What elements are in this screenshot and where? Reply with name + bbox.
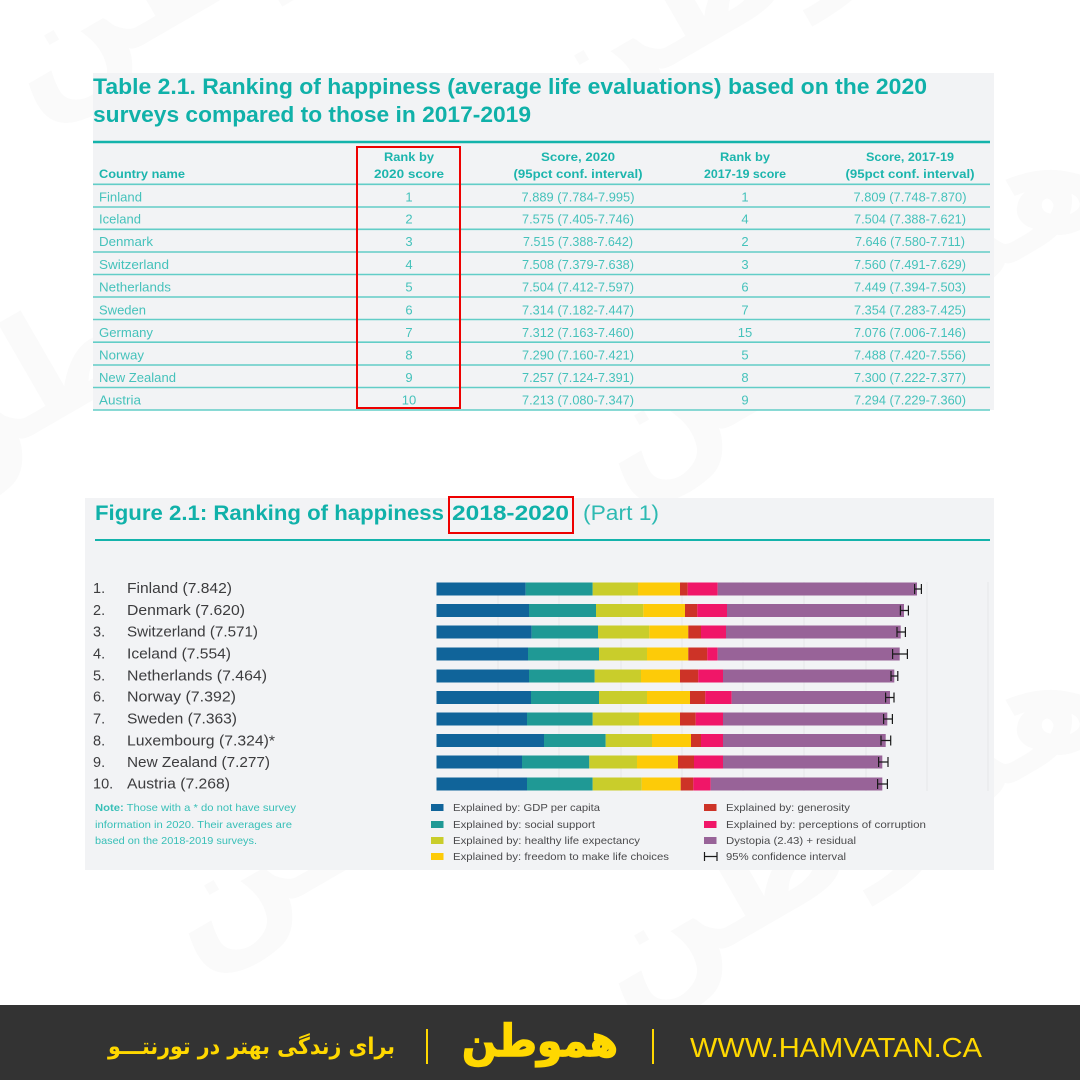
footer tagline: برای زندگی بهتر در تورنتـــو: [107, 1033, 395, 1060]
table rows: 4: [741, 212, 749, 226]
table rows: Denmark: [99, 234, 153, 249]
table header: Score, 2020: [541, 150, 615, 164]
country labels: 6.: [93, 690, 105, 706]
table rows: Switzerland: [99, 257, 169, 272]
table rows: 1: [405, 190, 413, 204]
table rows: 5: [741, 348, 749, 362]
country labels: Iceland (7.554): [127, 646, 231, 662]
panel: figure 2.1: [85, 497, 994, 870]
watermark pattern: هموطن: [121, 553, 706, 992]
legend: [431, 802, 926, 863]
table rules: [93, 142, 990, 410]
note: [95, 802, 297, 847]
table rows: 7.449 (7.394-7.503): [854, 280, 966, 294]
table rows: 9: [405, 370, 413, 385]
country labels: 2.: [93, 603, 105, 619]
table title: [93, 74, 927, 127]
table rows: 7.515 (7.388-7.642): [523, 234, 633, 249]
figure title: [95, 502, 659, 525]
country labels: 5.: [93, 668, 105, 684]
table rows: 7.809 (7.748-7.870): [854, 190, 966, 204]
table rows: 3: [405, 234, 413, 249]
table rows: 7.646 (7.580-7.711): [855, 234, 965, 249]
legend: Explained by: perceptions of corruption: [726, 819, 926, 831]
table rows: 7.314 (7.182-7.447): [522, 302, 634, 318]
table header: 2020 score: [374, 167, 444, 181]
table rows: 7.354 (7.283-7.425): [854, 302, 966, 318]
panel: table 2.1: [93, 73, 994, 410]
table rows: 7.889 (7.784-7.995): [522, 190, 634, 204]
legend: 95% confidence interval: [726, 851, 846, 863]
table header: 2017-19 score: [704, 167, 786, 181]
table rows: Finland: [99, 190, 142, 204]
table rows: 7.300 (7.222-7.377): [854, 370, 966, 385]
note: Note: Those with a * do not have survey: [95, 802, 297, 814]
country labels: 4.: [93, 646, 105, 662]
table rows: Sweden: [99, 302, 146, 318]
bar: Finland: [436, 582, 921, 596]
table header: [99, 150, 975, 181]
table rows: Iceland: [99, 212, 141, 226]
table rows: 5: [405, 280, 413, 294]
table rows: Norway: [99, 348, 144, 362]
legend: Explained by: healthy life expectancy: [453, 835, 641, 847]
bar: Denmark: [436, 604, 908, 617]
country labels: 8.: [93, 734, 105, 750]
table rows: 8: [405, 348, 413, 362]
footer url: WWW.HAMVATAN.CA: [690, 1032, 983, 1063]
table rows: 7: [405, 325, 413, 340]
table rows: New Zealand: [99, 370, 176, 385]
table rows: 7.294 (7.229-7.360): [854, 392, 966, 408]
table header: Score, 2017-19: [866, 150, 954, 164]
table rows: 9: [741, 392, 749, 408]
note: information in 2020. Their averages are: [95, 819, 292, 831]
table rows: 3: [741, 257, 749, 272]
bar: Luxembourg: [436, 734, 891, 747]
legend: Explained by: GDP per capita: [453, 802, 600, 814]
table rows: 1: [741, 190, 749, 204]
country labels: Denmark (7.620): [127, 603, 245, 619]
bar: Switzerland: [436, 626, 905, 638]
table rows: 8: [741, 370, 749, 385]
red highlight: 2018-2020: [449, 497, 573, 533]
figure title: (Part 1): [583, 502, 659, 525]
footer bar: [0, 1005, 1080, 1080]
table rows: 7.504 (7.412-7.597): [522, 280, 634, 294]
bar: New Zealand: [436, 756, 888, 768]
table rows: Netherlands: [99, 280, 172, 294]
country labels: 1.: [93, 581, 105, 597]
country labels: 3.: [93, 624, 105, 640]
note: based on the 2018-2019 surveys.: [95, 835, 257, 847]
country labels: Austria (7.268): [127, 776, 230, 792]
table title: surveys compared to those in 2017-2019: [93, 102, 531, 127]
country labels: Sweden (7.363): [127, 712, 237, 728]
legend: Explained by: freedom to make life choices: [453, 851, 669, 863]
table rows: 7.575 (7.405-7.746): [522, 212, 634, 226]
table title: Table 2.1. Ranking of happiness (average life evaluations) based on the 2020: [93, 74, 927, 99]
table header: Country name: [99, 167, 185, 181]
legend: Explained by: generosity: [726, 802, 851, 814]
table rows: [99, 190, 966, 408]
country labels: [93, 581, 275, 792]
country labels: Finland (7.842): [127, 581, 232, 597]
table rows: 7.508 (7.379-7.638): [522, 257, 634, 272]
table rows: 4: [405, 257, 413, 272]
table header: (95pct conf. interval): [514, 167, 643, 181]
country labels: New Zealand (7.277): [127, 755, 270, 771]
red highlight: rank by 2020 score column: [357, 147, 460, 408]
table rows: 10: [402, 392, 416, 408]
bar: Norway: [436, 691, 894, 704]
table rows: 7.504 (7.388-7.621): [854, 212, 966, 226]
bar: Sweden: [436, 712, 892, 726]
country labels: 10.: [93, 776, 113, 792]
table rows: 7.290 (7.160-7.421): [522, 348, 634, 362]
country labels: 7.: [93, 712, 105, 728]
stacked bar chart: [436, 582, 988, 791]
country labels: Switzerland (7.571): [127, 624, 258, 640]
country labels: Norway (7.392): [127, 690, 236, 706]
figure title: Figure 2.1: Ranking of happiness: [95, 502, 444, 525]
legend: Dystopia (2.43) + residual: [726, 835, 856, 847]
bar: Iceland: [436, 648, 907, 660]
country labels: Luxembourg (7.324)*: [127, 734, 275, 750]
figure title: 2018-2020: [452, 502, 569, 525]
footer logo: هموطن: [462, 1016, 618, 1067]
table rows: 7.076 (7.006-7.146): [854, 325, 966, 340]
table rows: 7: [741, 302, 749, 318]
table header: Rank by: [720, 150, 770, 164]
table rows: 15: [738, 325, 752, 340]
table rows: 6: [405, 302, 413, 318]
table header: Rank by: [384, 150, 434, 164]
table rows: 6: [741, 280, 749, 294]
country labels: 9.: [93, 755, 105, 771]
country labels: Netherlands (7.464): [127, 668, 267, 684]
table rows: 7.488 (7.420-7.556): [854, 348, 966, 362]
table rows: 7.257 (7.124-7.391): [522, 370, 634, 385]
legend: Explained by: social support: [453, 819, 595, 831]
table rows: 7.560 (7.491-7.629): [854, 257, 966, 272]
table rows: Austria: [99, 392, 142, 408]
table rows: 7.213 (7.080-7.347): [522, 392, 634, 408]
table header: (95pct conf. interval): [846, 167, 975, 181]
table rows: 7.312 (7.163-7.460): [522, 325, 634, 340]
bar: Austria: [436, 778, 887, 790]
bar: Netherlands: [436, 670, 898, 682]
table rows: 2: [741, 234, 749, 249]
table rows: Germany: [99, 325, 153, 340]
table rows: 2: [405, 212, 413, 226]
